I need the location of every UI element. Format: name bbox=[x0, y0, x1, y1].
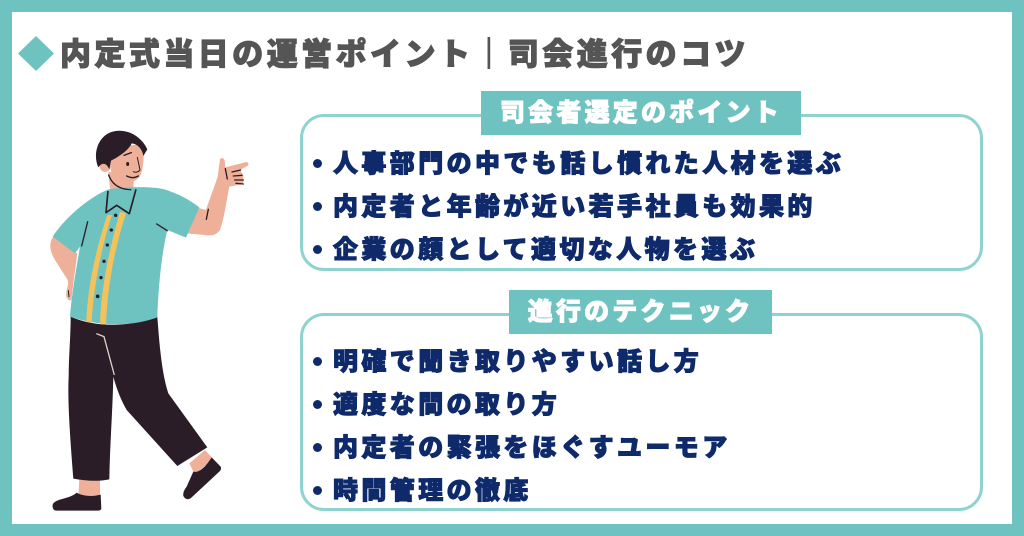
bullet item 1: 人事部門の中でも話し慣れた人材を選ぶ bbox=[333, 150, 844, 178]
icon: title diamond bbox=[18, 36, 54, 71]
bullet item 1: 明確で聞き取りやすい話し方 bbox=[333, 348, 702, 376]
panel: moderation techniques bbox=[300, 313, 983, 511]
buttons bbox=[96, 214, 117, 298]
heading: host selection points: 司会者選定のポイント bbox=[500, 99, 782, 127]
collar bbox=[106, 189, 136, 214]
face bbox=[109, 144, 144, 183]
shirt bbox=[53, 187, 199, 324]
bullet item 4: 時間管理の徹底 bbox=[333, 477, 532, 505]
shoes bbox=[53, 457, 221, 511]
bullet item 3: 内定者の緊張をほぐすユーモア bbox=[333, 434, 731, 462]
bullet item 2: 適度な間の取り方 bbox=[333, 391, 560, 419]
heading: moderation techniques bbox=[509, 290, 772, 334]
list: moderation techniques bbox=[313, 348, 731, 505]
back arm bbox=[50, 237, 77, 300]
title: 内定式当日の運営ポイント｜司会進行のコツ bbox=[60, 37, 749, 72]
panel: host selection points bbox=[300, 114, 983, 271]
skin: ankles bbox=[78, 450, 213, 498]
heading: host selection points bbox=[481, 91, 801, 135]
trousers bbox=[68, 317, 207, 481]
trouser seam bbox=[96, 334, 114, 375]
shirt placket bbox=[86, 212, 126, 325]
hair bbox=[96, 131, 147, 169]
bullet item 2: 内定者と年齢が近い若手社員も効果的 bbox=[333, 193, 816, 221]
bullet item 3: 企業の顔として適切な人物を選ぶ bbox=[333, 236, 758, 264]
facial lines bbox=[68, 153, 243, 297]
heading: moderation techniques: 進行のテクニック bbox=[528, 298, 753, 326]
eye bbox=[126, 162, 129, 166]
pointing arm bbox=[187, 158, 248, 236]
ear bbox=[100, 161, 110, 172]
list: host selection points bbox=[313, 150, 844, 264]
neck bbox=[108, 172, 134, 195]
